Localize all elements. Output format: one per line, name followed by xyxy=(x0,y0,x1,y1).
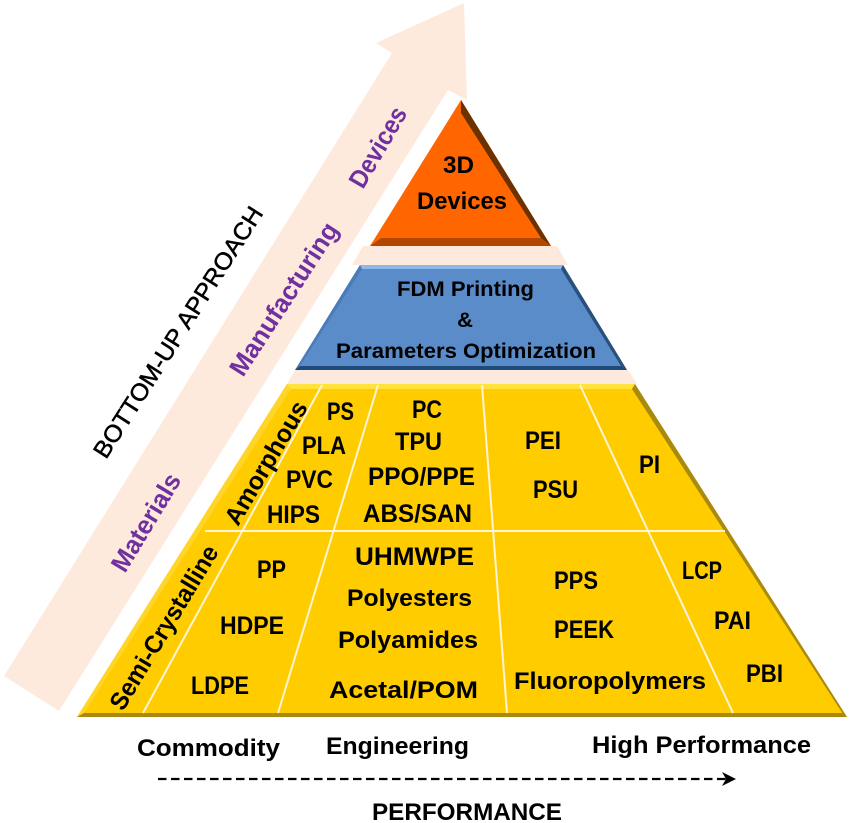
polymer labels: PEI xyxy=(525,427,561,455)
tier: 3D devices: 3D xyxy=(443,152,474,179)
polymer labels: PSU xyxy=(533,476,578,504)
performance dashed arrow xyxy=(158,772,736,786)
arrow label: manufacturing: Manufacturing xyxy=(223,216,344,381)
polymer labels: PPS xyxy=(554,567,598,595)
polymer labels: PI xyxy=(639,451,660,479)
peach gap between lower tiers xyxy=(287,370,637,384)
axis label: commodity: Commodity xyxy=(137,735,281,762)
category: amorphous: Amorphous xyxy=(219,396,314,530)
polymer labels: PBI xyxy=(746,660,783,688)
tier: FDM printing: FDM Printing xyxy=(397,278,534,301)
grid lines xyxy=(143,385,733,713)
polymer labels: TPU xyxy=(395,428,442,456)
arrow label: bottom-up approach: BOTTOM-UP APPROACH xyxy=(88,202,269,463)
polymer labels: PS xyxy=(327,398,354,426)
polymer labels: PAI xyxy=(714,607,751,635)
tier: FDM printing xyxy=(295,265,627,370)
tier: materials base xyxy=(77,384,847,717)
polymer labels: ABS/SAN xyxy=(363,500,472,528)
peach gap between top tiers xyxy=(352,246,568,265)
polymer labels: Fluoropolymers xyxy=(514,668,706,695)
bottom-up arrow xyxy=(4,3,467,711)
polymer labels: Polyamides xyxy=(338,627,478,654)
polymer labels: HDPE xyxy=(220,612,284,640)
tier: FDM printing: Parameters xyxy=(336,340,457,363)
polymer labels: PLA xyxy=(302,432,346,460)
polymer labels: LDPE xyxy=(191,672,249,700)
polymer labels: PC xyxy=(412,396,442,424)
polymer labels: PPO/PPE xyxy=(368,463,475,491)
tier: FDM printing: Optimization xyxy=(463,340,596,363)
arrow label: devices: Devices xyxy=(342,101,413,193)
tier: FDM printing: & xyxy=(457,309,473,332)
polymer labels: UHMWPE xyxy=(355,543,474,571)
polymer labels xyxy=(191,396,783,704)
polymer labels: PP xyxy=(257,556,286,584)
polymer labels: Acetal/POM xyxy=(329,677,478,704)
polymer labels: PVC xyxy=(286,466,333,494)
polymer labels: Polyesters xyxy=(347,585,472,612)
arrow label: materials: Materials xyxy=(104,467,187,577)
tier: 3D devices xyxy=(370,100,551,246)
axis label: engineering: Engineering xyxy=(326,733,469,760)
axis label: high performance: High Performance xyxy=(592,732,811,759)
polymer labels: HIPS xyxy=(267,501,320,529)
category: semi-crystalline: Semi-Crystalline xyxy=(104,540,224,715)
polymer labels: PEEK xyxy=(554,616,614,644)
tier: 3D devices: Devices xyxy=(417,188,507,215)
polymer labels: LCP xyxy=(682,557,722,585)
